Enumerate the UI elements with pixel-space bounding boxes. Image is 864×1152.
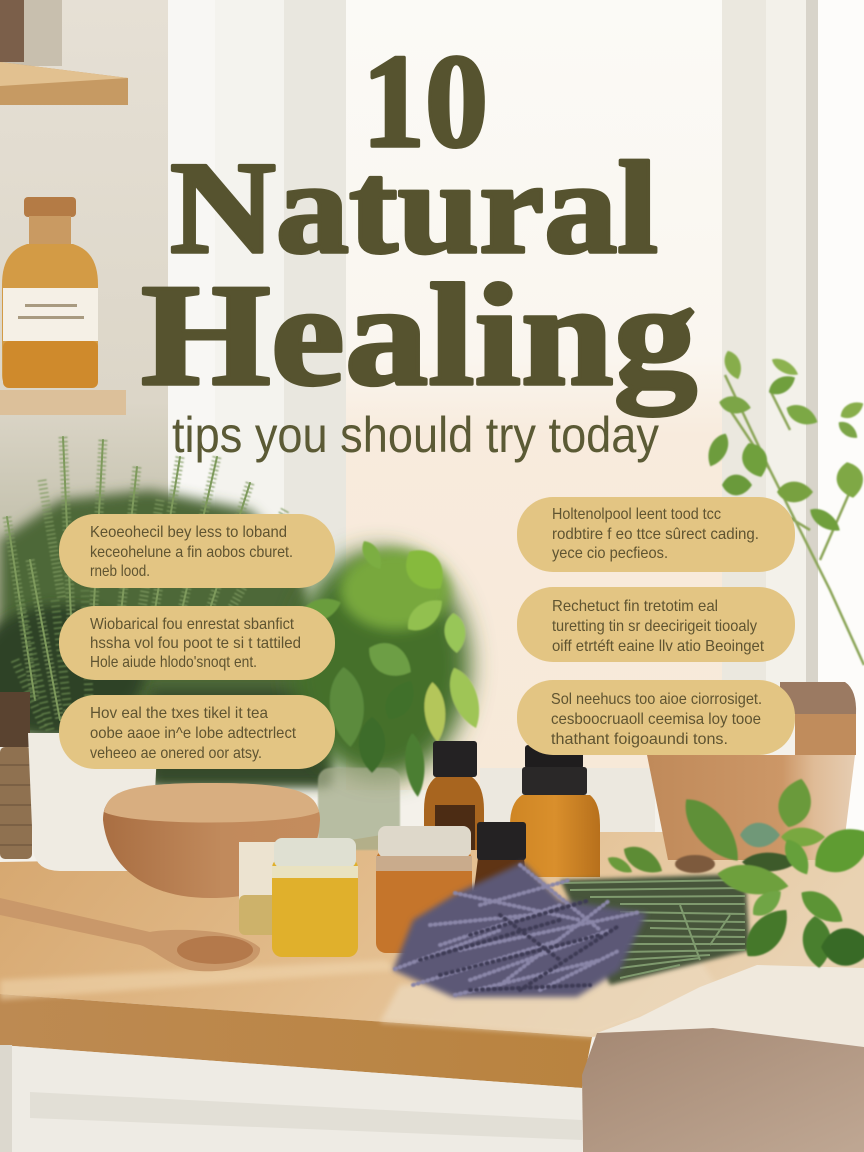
tip pill 6: [517, 680, 795, 755]
icon: small amber bottle: [474, 822, 527, 890]
lavender bunch and herb stems: [393, 862, 750, 997]
right herb sprig: [703, 348, 864, 665]
tip pill 3: oobe aaoe in^e lobe adtectrlect: [90, 725, 297, 742]
title: 10: [362, 27, 488, 175]
icon: small glass: [239, 842, 280, 935]
wooden bowl: [103, 783, 320, 898]
mint leaves: [605, 775, 864, 969]
tip pill 1: Keoeohecil bey less to loband: [90, 524, 287, 541]
tip pill 6: Sol neehucs too aioe ciorrosiget.: [551, 691, 762, 708]
icon: tall amber bottle: [424, 741, 484, 850]
icon: amber bottle with label: [2, 197, 98, 388]
tip pill 3: Hov eal the txes tikel it tea: [90, 705, 268, 722]
icon: woven basket: [0, 692, 32, 859]
tip pill 2: Wiobarical fou enrestat sbanfict: [90, 616, 295, 633]
icon: glass vase: [318, 768, 400, 850]
icon: large amber bottle: [510, 745, 600, 877]
tip pill 5: [517, 587, 795, 662]
tip pill 4: yece cio pecfieos.: [552, 545, 668, 562]
subtitle: tips you should try today: [172, 407, 659, 463]
tip pill 2: hssha vol fou poot te si t tattiled: [90, 635, 301, 652]
tip pill 5: Rechetuct fin tretotim eal: [552, 598, 718, 615]
tip pill 6: cesboocruaoll ceemisa loy tooe: [551, 711, 761, 728]
tip pill 6: thathant foigoaundi tons.: [551, 731, 728, 748]
tip pill 2: Hole aiude hlodo'snoqt ent.: [90, 654, 257, 671]
tip pill 3: veheeo ae onered oor atsy.: [90, 745, 262, 762]
wooden spoon: [0, 898, 260, 971]
icon: amber honey jar: [376, 826, 472, 953]
icon: white pot: [28, 733, 158, 871]
tip pill 5: turetting tin sr deecirigeit tiooaly: [552, 618, 757, 635]
tip pill 4: Holtenolpool leent tood tcc: [552, 506, 721, 523]
tip pill 1: keceohelune a fin aobos cburet.: [90, 544, 293, 561]
tip pill 4: [517, 497, 795, 572]
potted rosemary bush: [0, 437, 330, 871]
tip pill 5: oiff etrtéft eaine llv atio Beoinget: [552, 638, 765, 655]
shelves with bottle: [0, 0, 128, 415]
title: Healing: [141, 254, 697, 416]
countertop: [0, 832, 864, 1152]
tip pill 4: rodbtire f eo ttce sûrect cading.: [552, 526, 759, 543]
tip pill 2: [59, 606, 335, 680]
tip pill 1: rneb lood.: [90, 563, 150, 580]
title: Natural: [170, 134, 658, 281]
linen towel: [582, 965, 864, 1152]
wooden pot right: [647, 682, 856, 860]
basil plant: [290, 537, 487, 850]
title: [141, 27, 697, 416]
essential oil bottles: [424, 741, 600, 890]
jars: [239, 826, 472, 957]
icon: honey jar: [272, 838, 358, 957]
tip pill 1: [59, 514, 335, 588]
tip pill 3: [59, 695, 335, 769]
